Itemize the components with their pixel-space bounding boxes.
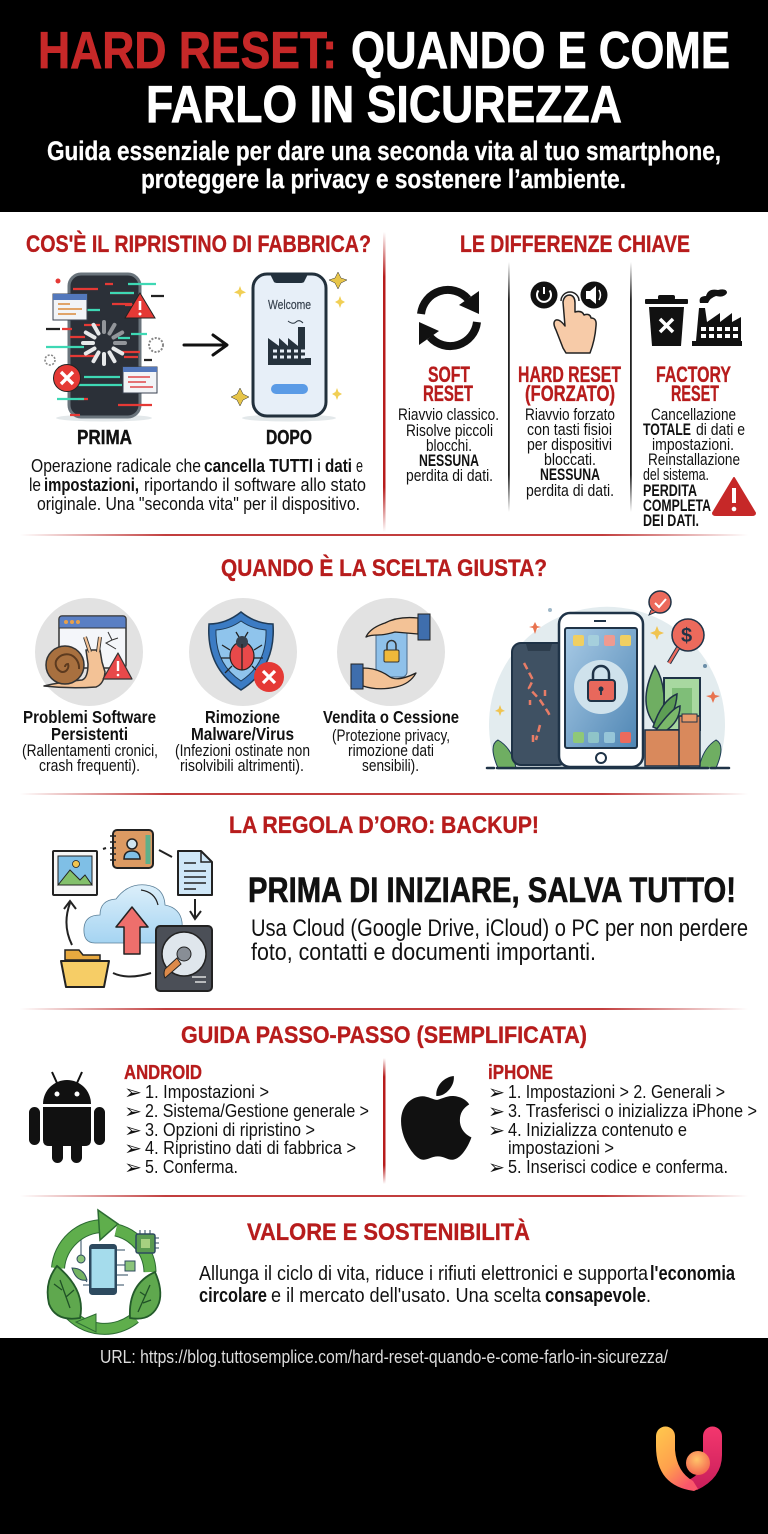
item text — [175, 742, 310, 775]
item title: Malware/Virus — [191, 724, 294, 744]
logo — [656, 1426, 722, 1491]
icon: shield with bug — [189, 598, 297, 706]
item text: sensibili). — [362, 757, 419, 775]
callout text: foto, contatti e documenti importanti. — [251, 939, 596, 966]
divider: after section three — [20, 1008, 748, 1010]
icon: apple logo — [401, 1076, 471, 1160]
sustainability text — [199, 1263, 736, 1307]
soft reset text: NESSUNA — [419, 452, 479, 470]
android steps — [124, 1062, 369, 1179]
item title — [23, 707, 156, 744]
item: problemi software — [22, 598, 158, 775]
soft reset heading: SOFT — [428, 362, 470, 387]
icon: clean phone after — [231, 272, 347, 422]
description text: cancella TUTTI — [204, 455, 313, 476]
sustainability text: Allunga il ciclo di vita, riduce i rifiuti elettronici e supporta — [199, 1263, 649, 1285]
iphone steps: 1. Impostazioni > 2. Generali > — [508, 1081, 725, 1102]
divider: after section one — [20, 534, 748, 536]
android steps: 3. Opzioni di ripristino > — [145, 1119, 315, 1140]
sustainability text: l'economia — [650, 1263, 736, 1285]
item text: risolvibili altrimenti). — [180, 757, 304, 775]
header band — [0, 0, 768, 212]
iphone steps — [488, 1062, 757, 1179]
android steps: ➢ — [124, 1157, 142, 1179]
icon: android robot — [29, 1072, 105, 1163]
factory reset heading — [656, 362, 731, 406]
item text: rimozione dati — [348, 742, 434, 760]
android steps: 5. Conferma. — [145, 1156, 238, 1177]
item title: Vendita o Cessione — [323, 707, 459, 727]
description text: impostazioni, — [44, 474, 139, 495]
android steps: ➢ — [124, 1138, 142, 1160]
illustration: phones, lock and plant — [487, 591, 729, 770]
icon: warning triangle — [713, 478, 755, 515]
illustration: backup cycle — [53, 830, 212, 991]
soft reset text: Riavvio classico. — [398, 406, 499, 424]
welcome text: Welcome — [268, 297, 311, 312]
item text: (Rallentamenti cronici, — [22, 742, 158, 760]
iphone steps: ➢ — [488, 1120, 505, 1142]
factory reset text — [643, 406, 745, 530]
factory reset heading: FACTORY — [656, 362, 731, 387]
hard reset text: per dispositivi — [527, 436, 612, 454]
label: prima: PRIMA — [77, 427, 132, 449]
hard reset heading: HARD RESET — [518, 362, 621, 387]
soft reset heading: RESET — [423, 381, 473, 406]
divider: after section four — [20, 1195, 748, 1197]
footer band — [0, 1338, 768, 1534]
item text: crash frequenti). — [39, 757, 140, 775]
item title: Problemi Software — [23, 707, 156, 727]
iphone heading: iPHONE — [488, 1062, 553, 1084]
iphone steps: ➢ — [488, 1101, 505, 1123]
item title — [191, 707, 294, 744]
factory reset heading: RESET — [671, 381, 719, 406]
panel: cos'è il ripristino — [26, 230, 371, 514]
heading: backup: LA REGOLA D’ORO: BACKUP! — [229, 812, 539, 839]
factory reset text: Reinstallazione — [648, 451, 740, 469]
item title: Rimozione — [205, 707, 280, 727]
iphone steps: ➢ — [488, 1157, 505, 1179]
divider: section one vertical — [383, 232, 386, 532]
subtitle: proteggere la privacy e sostenere l’ambiente. — [141, 164, 626, 194]
icon: recycling phone — [48, 1210, 160, 1332]
android steps: 4. Ripristino dati di fabbrica > — [145, 1137, 356, 1158]
iphone steps: 4. Inizializza contenuto e — [508, 1119, 687, 1140]
hard reset text: NESSUNA — [540, 466, 600, 484]
title: FARLO IN SICUREZZA — [146, 76, 622, 134]
iphone steps: ➢ — [488, 1082, 505, 1104]
hard reset text — [525, 406, 615, 500]
item: rimozione malware — [175, 598, 310, 775]
android heading: ANDROID — [124, 1062, 202, 1084]
heading: sostenibilità: VALORE E SOSTENIBILITÀ — [247, 1218, 530, 1246]
factory reset text: DEI DATI. — [643, 512, 699, 530]
android steps: ➢ — [124, 1120, 142, 1142]
icon: finger on buttons — [530, 282, 608, 353]
android steps: 2. Sistema/Gestione generale > — [145, 1100, 369, 1121]
factory reset text: di dati e — [696, 421, 745, 439]
icon: hands and phone — [337, 598, 445, 706]
description text: Operazione radicale che — [31, 455, 201, 476]
item text: (Infezioni ostinate non — [175, 742, 310, 760]
heading: cos'è il ripristino: COS'È IL RIPRISTINO DI FABBRICA? — [26, 230, 371, 258]
android steps: 1. Impostazioni > — [145, 1081, 269, 1102]
soft reset text — [398, 406, 499, 485]
heading: guida: GUIDA PASSO-PASSO (SEMPLIFICATA) — [181, 1022, 587, 1049]
item: vendita o cessione — [323, 598, 459, 775]
description text: i — [317, 455, 321, 476]
panel: valore e sostenibilità — [48, 1210, 736, 1332]
description text: riportando il software allo stato — [144, 474, 366, 495]
soft reset heading — [423, 362, 473, 406]
item text — [22, 742, 158, 775]
heading: scelta giusta: QUANDO È LA SCELTA GIUSTA? — [221, 554, 547, 582]
description text: e — [356, 455, 363, 476]
column: factory reset — [643, 289, 755, 530]
icon: broken phone before — [45, 274, 164, 422]
soft reset text: blocchi. — [426, 437, 472, 455]
illustration: phones, lock and plant: $ — [681, 625, 692, 647]
description text: originale. Una "seconda vita" per il dispositivo. — [37, 493, 360, 514]
hard reset text: Riavvio forzato — [525, 406, 615, 424]
soft reset text: Risolve piccoli — [406, 422, 493, 440]
arrow: prima to dopo — [184, 335, 227, 355]
description text — [29, 455, 366, 514]
item text — [332, 727, 450, 775]
android steps: ➢ — [124, 1101, 142, 1123]
panel: le differenze chiave — [398, 231, 755, 530]
factory reset text: impostazioni. — [652, 436, 734, 454]
item text: (Protezione privacy, — [332, 727, 450, 745]
icon: sync arrows — [419, 290, 479, 346]
icon: trash bin — [645, 295, 688, 346]
hard reset text: perdita di dati. — [526, 482, 614, 500]
divider: after section two — [20, 793, 748, 795]
factory reset text: del sistema. — [643, 466, 709, 484]
hard reset heading — [518, 362, 621, 406]
icon: snail and window — [35, 598, 143, 706]
factory reset text: COMPLETA — [643, 497, 711, 515]
sustainability text: e il mercato dell'usato. Una scelta — [271, 1285, 542, 1307]
sustainability text: circolare — [199, 1285, 267, 1307]
iphone steps: 5. Inserisci codice e conferma. — [508, 1156, 728, 1177]
sustainability text: . — [646, 1285, 651, 1307]
callout text — [251, 915, 748, 966]
icon: factory — [692, 289, 742, 346]
sustainability text: consapevole — [545, 1285, 646, 1307]
hard reset heading: (FORZATO) — [525, 381, 615, 406]
factory reset text: PERDITA — [643, 482, 697, 500]
title: HARD RESET: — [38, 22, 337, 80]
iphone steps: impostazioni > — [508, 1137, 614, 1158]
panel: la regola d'oro — [53, 812, 748, 991]
subtitle — [47, 136, 721, 194]
description text: le — [29, 474, 41, 495]
soft reset text: perdita di dati. — [406, 467, 493, 485]
heading: differenze: LE DIFFERENZE CHIAVE — [460, 231, 690, 258]
column: soft reset — [398, 290, 499, 485]
item title: Persistenti — [51, 724, 128, 744]
android steps: ➢ — [124, 1082, 142, 1104]
source url: URL: https://blog.tuttosemplice.com/hard-reset-quando-e-come-farlo-in-sicurezza/ — [100, 1347, 668, 1367]
label: dopo: DOPO — [266, 427, 312, 449]
hard reset text: con tasti fisioi — [527, 421, 612, 439]
title — [38, 22, 730, 134]
factory reset text: Cancellazione — [651, 406, 736, 424]
hard reset text: bloccati. — [544, 451, 596, 469]
panel: guida passo-passo — [29, 1022, 757, 1184]
panel: quando è la scelta giusta — [22, 554, 729, 775]
description text: dati — [325, 455, 352, 476]
column: hard reset — [518, 282, 621, 500]
factory reset text: TOTALE — [643, 421, 691, 439]
